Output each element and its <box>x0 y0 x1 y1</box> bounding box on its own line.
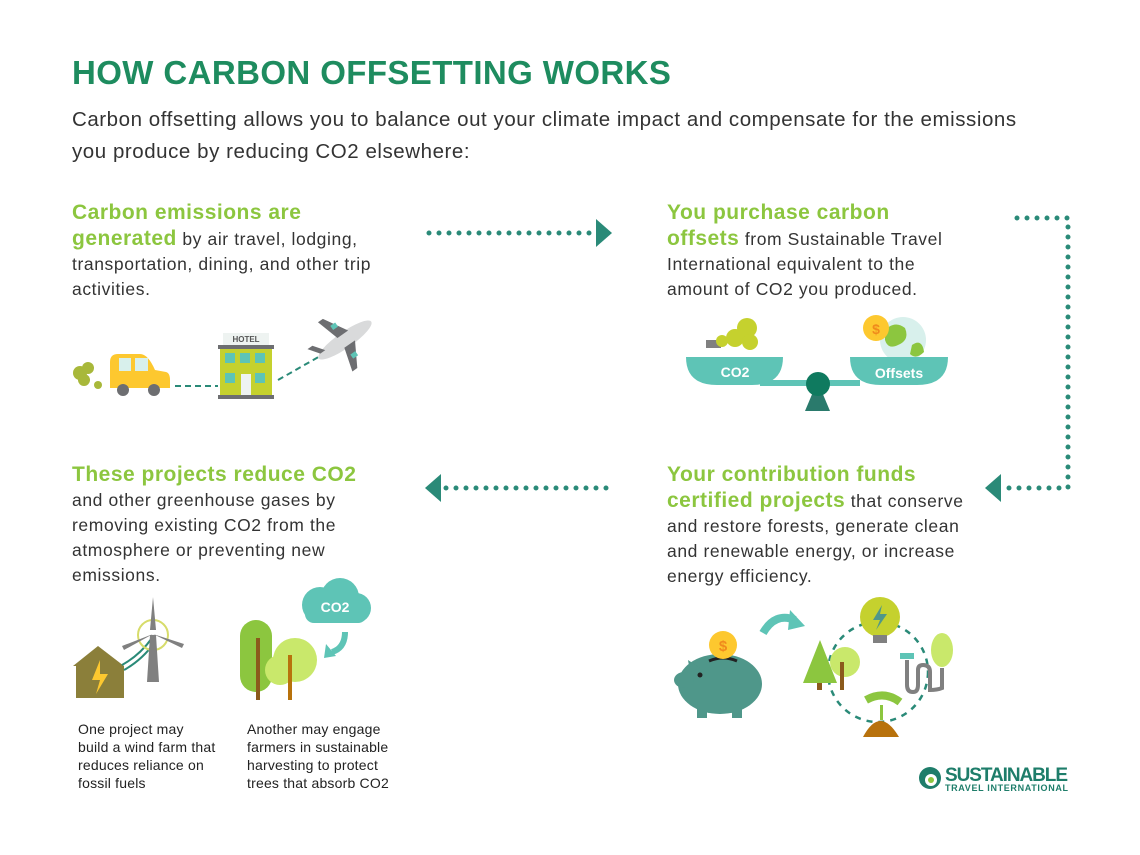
text block: step 3: and renewable energy, or increase <box>667 541 955 561</box>
text block: step 4: and other greenhouse gases by <box>72 490 336 510</box>
text block: step 1 <box>72 201 371 299</box>
arrow: step3 to step4 <box>425 474 610 502</box>
icon group: car hotel plane: HOTEL <box>232 335 260 344</box>
text block: step 4 <box>72 463 356 585</box>
caption: wind farm: reduces reliance on <box>78 757 204 773</box>
title: HOW CARBON OFFSETTING WORKS <box>72 54 671 91</box>
caption: wind farm: One project may <box>78 721 184 737</box>
text block: step 1: Carbon emissions are <box>72 201 301 224</box>
text block: step 2 <box>667 201 942 299</box>
text block: step 1: activities. <box>72 279 151 299</box>
icon: scale: $ <box>872 321 880 337</box>
text block: step 2: offsets from Sustainable Travel <box>667 227 942 250</box>
caption: farmers <box>247 721 389 791</box>
caption: wind farm: build a wind farm that <box>78 739 215 755</box>
icon: scale: CO2 <box>721 364 750 380</box>
text block: step 3 <box>667 463 964 586</box>
caption: farmers: farmers in sustainable <box>247 739 388 755</box>
text block: step 2: International equivalent to the <box>667 254 915 274</box>
logo <box>919 765 1068 793</box>
arrow: step1 to step2 <box>429 219 612 247</box>
intro text <box>72 108 1017 163</box>
text block: step 4: removing existing CO2 from the <box>72 515 336 535</box>
intro text: you produce by reducing CO2 elsewhere: <box>72 140 470 163</box>
text block: step 2: amount of CO2 you produced. <box>667 279 918 299</box>
intro text: Carbon offsetting allows you to balance out your climate impact and compensate for the emissions <box>72 108 1017 131</box>
text block: step 3: Your contribution funds <box>667 463 916 486</box>
icon: trees and CO2 cloud <box>240 578 371 700</box>
text block: step 4: atmosphere or preventing new <box>72 540 325 560</box>
icon: wind farm and house <box>73 597 184 698</box>
icon group: car hotel plane <box>73 297 388 399</box>
text block: step 1: transportation, dining, and other trip <box>72 254 371 274</box>
text block: step 4: emissions. <box>72 565 161 585</box>
caption: wind farm <box>78 721 216 791</box>
text block: step 3: energy efficiency. <box>667 566 812 586</box>
arrow: step2 to step3 <box>985 218 1068 502</box>
text block: step 4: These projects reduce CO2 <box>72 463 356 486</box>
text block: step 2: You purchase carbon <box>667 201 890 224</box>
caption: wind farm: fossil fuels <box>78 775 146 791</box>
icon: scale <box>686 315 948 411</box>
text block: step 3: and restore forests, generate clean <box>667 516 959 536</box>
text block: step 1: generated by air travel, lodging, <box>72 227 358 250</box>
caption: farmers: Another may engage <box>247 721 381 737</box>
text block: step 3: certified projects that conserve <box>667 489 964 512</box>
icon: scale: Offsets <box>875 365 923 381</box>
icon: piggy bank and project cycle: $ <box>719 638 728 655</box>
icon: trees and CO2 cloud: CO2 <box>321 599 350 615</box>
logo: SUSTAINABLE <box>945 765 1068 786</box>
caption: farmers: trees that absorb CO2 <box>247 775 389 791</box>
logo: TRAVEL INTERNATIONAL <box>945 783 1068 793</box>
icon: piggy bank and project cycle <box>674 597 953 737</box>
caption: farmers: harvesting to protect <box>247 757 378 773</box>
